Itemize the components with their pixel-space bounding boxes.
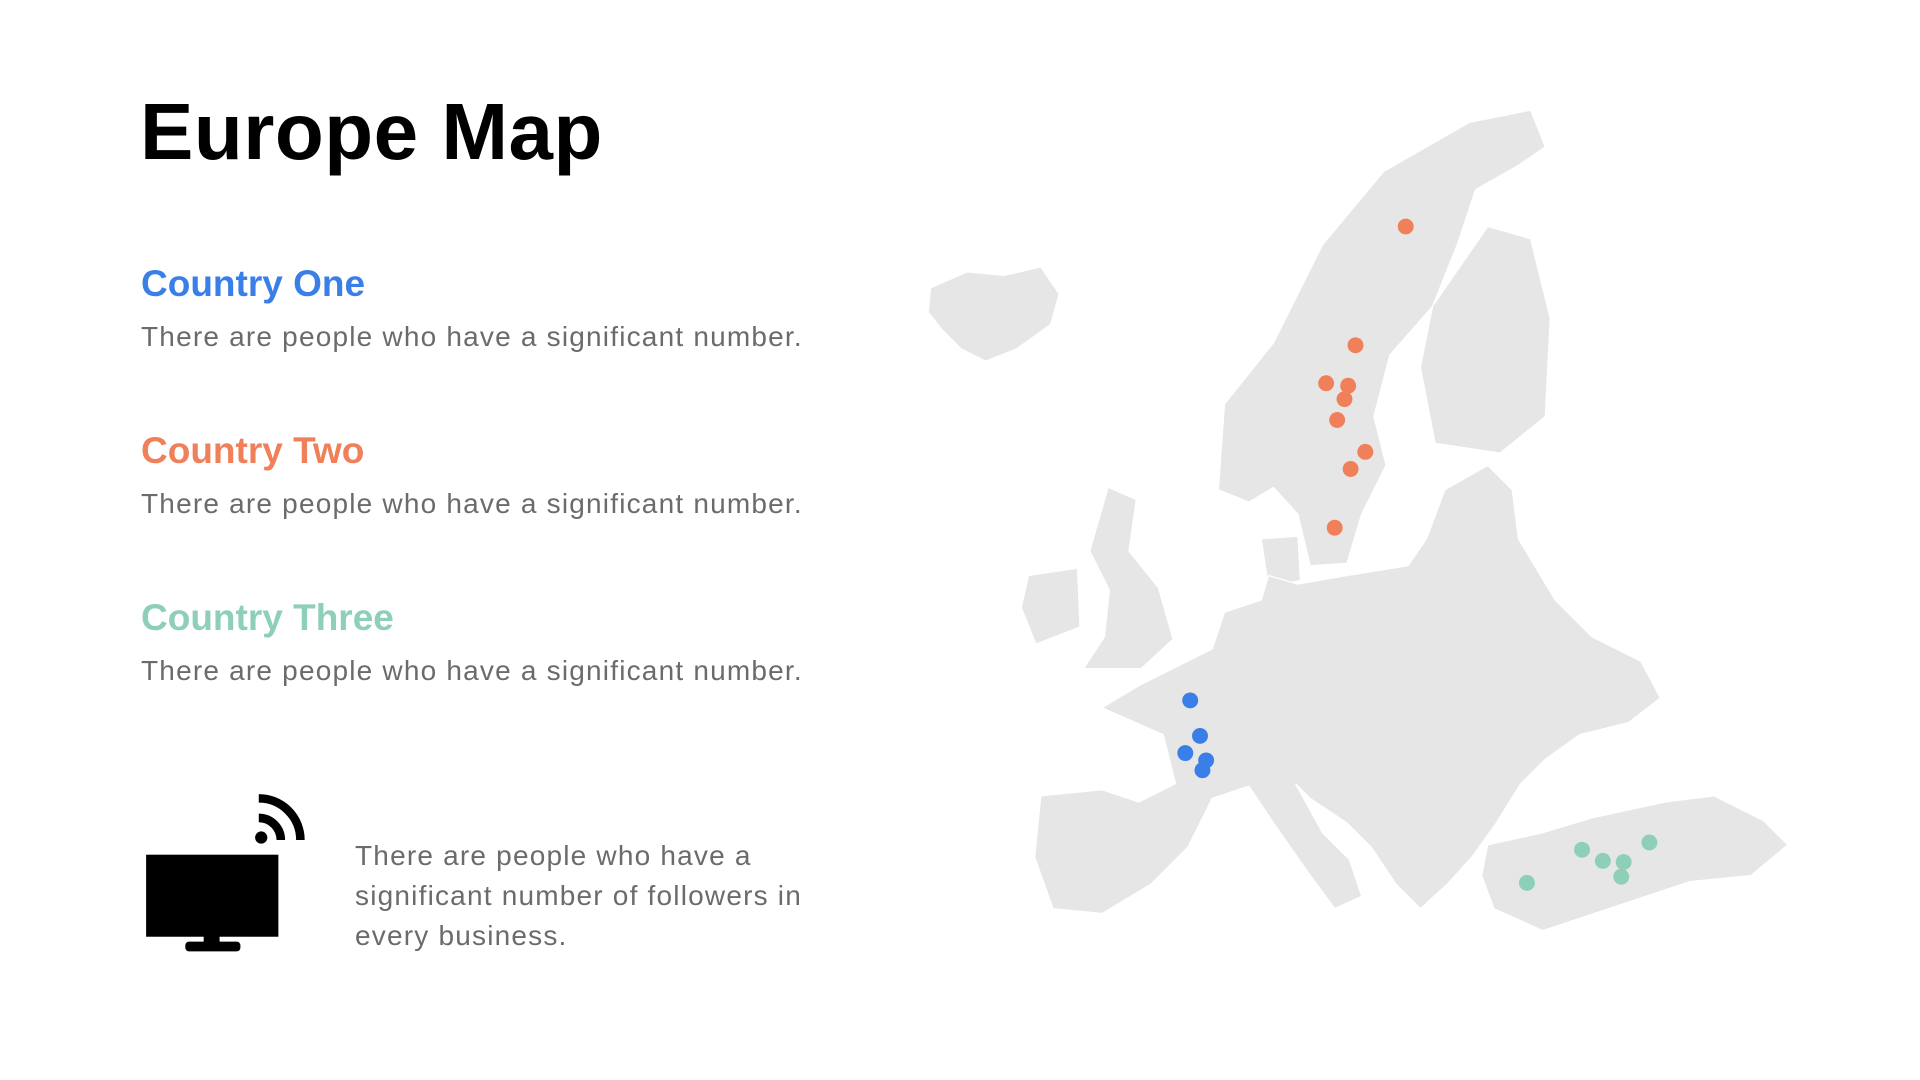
denmark: [1261, 536, 1300, 588]
turkey: [1482, 796, 1788, 931]
heading: country one: Country One: [141, 263, 365, 304]
legend item: country three: [141, 597, 803, 686]
heading: country two: Country Two: [141, 430, 364, 471]
uk & ireland: [1084, 487, 1173, 669]
legend item: country two: [141, 430, 803, 519]
mainland: [1035, 465, 1660, 913]
iceland: [928, 267, 1059, 361]
legend item: country one: [141, 263, 803, 352]
text: country two: There are people who have a significant number.: [141, 488, 803, 519]
scandinavia: [1218, 110, 1545, 566]
markers: country one: [1177, 692, 1214, 778]
title: Europe Map: [140, 87, 603, 176]
icon: tv with signal: [146, 794, 305, 952]
text: country three: There are people who have a significant number.: [141, 655, 803, 686]
heading: country three: Country Three: [141, 597, 394, 638]
text: description: There are people who have a: [355, 840, 752, 871]
markers: country two: [1318, 219, 1414, 536]
text: country one: There are people who have a significant number.: [141, 321, 803, 352]
markers: country three: [1519, 834, 1657, 891]
text: description: significant number of followers in: [355, 880, 802, 911]
text: description: [355, 840, 802, 951]
text: description: every business.: [355, 920, 568, 951]
